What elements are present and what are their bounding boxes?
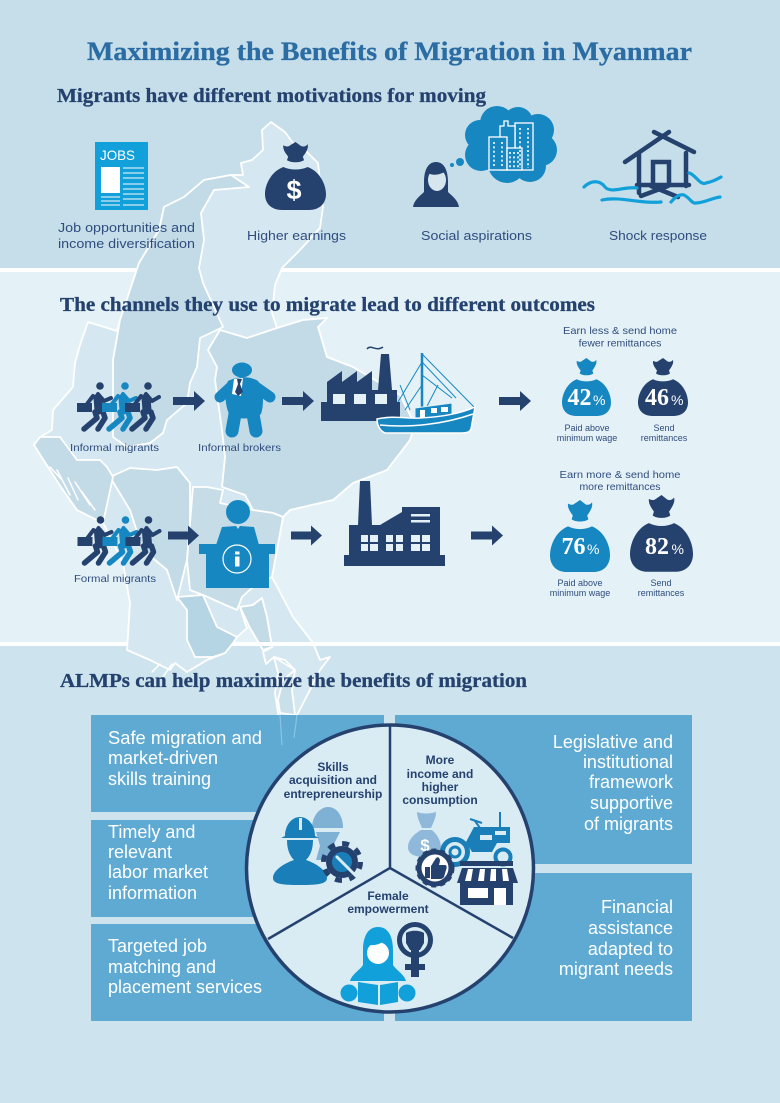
segment text: skills: [284, 760, 382, 801]
box: legislative framework: Legislative and: [553, 732, 673, 752]
caption: paid above minimum wage: Paid above: [564, 423, 610, 433]
map: central dark region: [110, 467, 190, 600]
label: informal brokers: Informal brokers: [198, 442, 281, 454]
bag: 46 percent: 46: [645, 385, 669, 411]
box: labor market information: labor market: [108, 862, 208, 882]
map of Myanmar background: [34, 122, 415, 745]
panel: ALMPs: [60, 670, 692, 1021]
segment text: income: higher: [422, 780, 459, 794]
panel: motivations: [57, 85, 721, 251]
bag: 82 percent: [630, 495, 693, 572]
outcome text: earn less: Earn less & send home: [563, 325, 677, 337]
box: job matching: Targeted job: [108, 936, 207, 956]
icon: information desk: [199, 500, 275, 588]
icon: modern factory: [344, 481, 445, 566]
box: legislative framework: of migrants: [584, 814, 673, 834]
segment text: income: [402, 753, 478, 807]
segment text: female empowerment: [347, 889, 429, 916]
bag: 82 percent: %: [672, 541, 684, 557]
icon: fishing boat: [377, 353, 475, 433]
icon: formal migrants runners: [78, 516, 160, 563]
bag: 82 percent: 82: [645, 534, 669, 560]
bag: 46 percent: [638, 358, 688, 416]
caption: send remittances: remittances: [638, 588, 685, 598]
box: labor market information: relevant: [108, 842, 172, 862]
bag: 42 percent: [562, 358, 611, 416]
box: job matching: [91, 924, 384, 1021]
map: small central region: [187, 487, 283, 610]
segment text: skills: entrepreneurship: [284, 787, 382, 801]
bag: 76 percent: %: [587, 541, 599, 557]
segment text: female empowerment: empowerment: [347, 902, 429, 916]
icon: flooded house: [584, 132, 721, 203]
map: country outline: [34, 122, 415, 745]
icon: informal migrants runners: [77, 382, 159, 429]
icon: money bag: [265, 142, 326, 210]
icon: woman dreaming of city: [413, 106, 557, 207]
map: northern dark region: [113, 175, 249, 447]
outcome text: earn more: [560, 469, 681, 493]
label: job opportunities: income diversification: [58, 236, 195, 251]
title: Maximizing the Benefits of Migration in Myanmar: [87, 37, 692, 66]
segment text: income: income and: [407, 767, 473, 781]
caption: send remittances: Send: [653, 423, 675, 433]
box: labor market information: [91, 820, 384, 917]
icon: woman reading with symbol: [340, 924, 430, 1005]
box: legislative framework: institutional: [583, 752, 673, 772]
bag: 76 percent: [550, 500, 610, 572]
map tail over box: [280, 715, 297, 745]
box: financial assistance: migrant needs: [559, 959, 673, 979]
box: labor market information: information: [108, 883, 197, 903]
arrow: [499, 391, 531, 411]
icon: money tractor and shop: [408, 812, 518, 905]
arrow: [471, 526, 503, 546]
caption: paid above minimum wage: Paid above: [557, 578, 603, 588]
heading: motivations: Migrants have different motivations for moving: [57, 85, 487, 107]
box: safe migration: Safe migration and: [108, 728, 262, 748]
label: social aspirations: Social aspirations: [421, 228, 533, 243]
outcome text: earn more: Earn more & send home: [560, 469, 681, 481]
map: southern delta region: [177, 595, 237, 657]
arrow: [291, 526, 322, 546]
label: shock response: Shock response: [609, 228, 707, 243]
box: financial assistance: assistance: [588, 918, 673, 938]
bag: 76 percent: 76: [562, 534, 586, 560]
box: safe migration: skills training: [108, 769, 211, 789]
caption: send remittances: remittances: [641, 433, 688, 443]
caption: paid above minimum wage: [550, 578, 610, 598]
box: safe migration: [91, 715, 384, 812]
bag: 42 percent: %: [593, 392, 605, 408]
map: coastal islands: [50, 467, 172, 678]
box: safe migration: market-driven: [108, 748, 218, 768]
map: western coastal region: [34, 437, 113, 523]
heading: channels: The channels they use to migrate lead to different outcomes: [60, 294, 595, 316]
map: eastern dark region: [208, 318, 415, 517]
segment text: skills: Skills: [317, 760, 349, 774]
panel: channels: [60, 294, 693, 598]
map: southern peninsula region: [274, 657, 295, 715]
caption: paid above minimum wage: [557, 423, 617, 443]
bag: 46 percent: %: [671, 392, 683, 408]
caption: send remittances: [641, 423, 688, 443]
icon: jobs newspaper: JOBS: [100, 147, 135, 163]
outcome text: earn less: fewer remittances: [579, 338, 661, 350]
box: job matching: placement services: [108, 977, 262, 997]
arrow: [173, 391, 205, 411]
segment text: female empowerment: Female: [367, 889, 409, 903]
icon: money tractor and shop: $: [420, 836, 430, 855]
box: legislative framework: framework: [589, 772, 674, 792]
outcome text: earn more: more remittances: [579, 481, 661, 493]
icon: workers and gear: [273, 807, 360, 885]
label: job opportunities: [58, 220, 195, 251]
label: formal migrants: Formal migrants: [74, 573, 156, 585]
label: informal migrants: Informal migrants: [70, 442, 159, 454]
box: financial assistance: Financial: [601, 897, 673, 917]
pie: outcomes circle: [246, 725, 534, 1012]
segment text: skills: acquisition and: [289, 773, 377, 787]
outcome text: earn less: [563, 325, 677, 350]
arrow: [282, 391, 314, 411]
box: financial assistance: [395, 873, 692, 1021]
icon: jobs newspaper: [95, 142, 148, 210]
arrow: [168, 526, 199, 546]
caption: paid above minimum wage: minimum wage: [550, 588, 610, 598]
box: legislative framework: supportive: [590, 793, 673, 813]
caption: send remittances: Send: [650, 578, 672, 588]
icon: informal broker: [220, 362, 270, 431]
heading: ALMPs: ALMPs can help maximize the benefits of migration: [60, 670, 528, 692]
box: financial assistance: adapted to: [588, 939, 673, 959]
label: job opportunities: Job opportunities and: [58, 220, 195, 235]
map: southeastern region: [240, 598, 272, 650]
bag: 42 percent: 42: [568, 385, 592, 411]
box: job matching: matching and: [108, 957, 216, 977]
icon: factory: [321, 347, 400, 421]
box: labor market information: Timely and: [108, 822, 195, 842]
segment text: income: More: [426, 753, 455, 767]
icon: money bag: $: [286, 175, 302, 205]
label: higher earnings: Higher earnings: [247, 228, 347, 243]
caption: send remittances: [638, 578, 685, 598]
segment text: income: consumption: [402, 793, 478, 807]
box: legislative framework: [395, 715, 692, 864]
caption: paid above minimum wage: minimum wage: [557, 433, 617, 443]
